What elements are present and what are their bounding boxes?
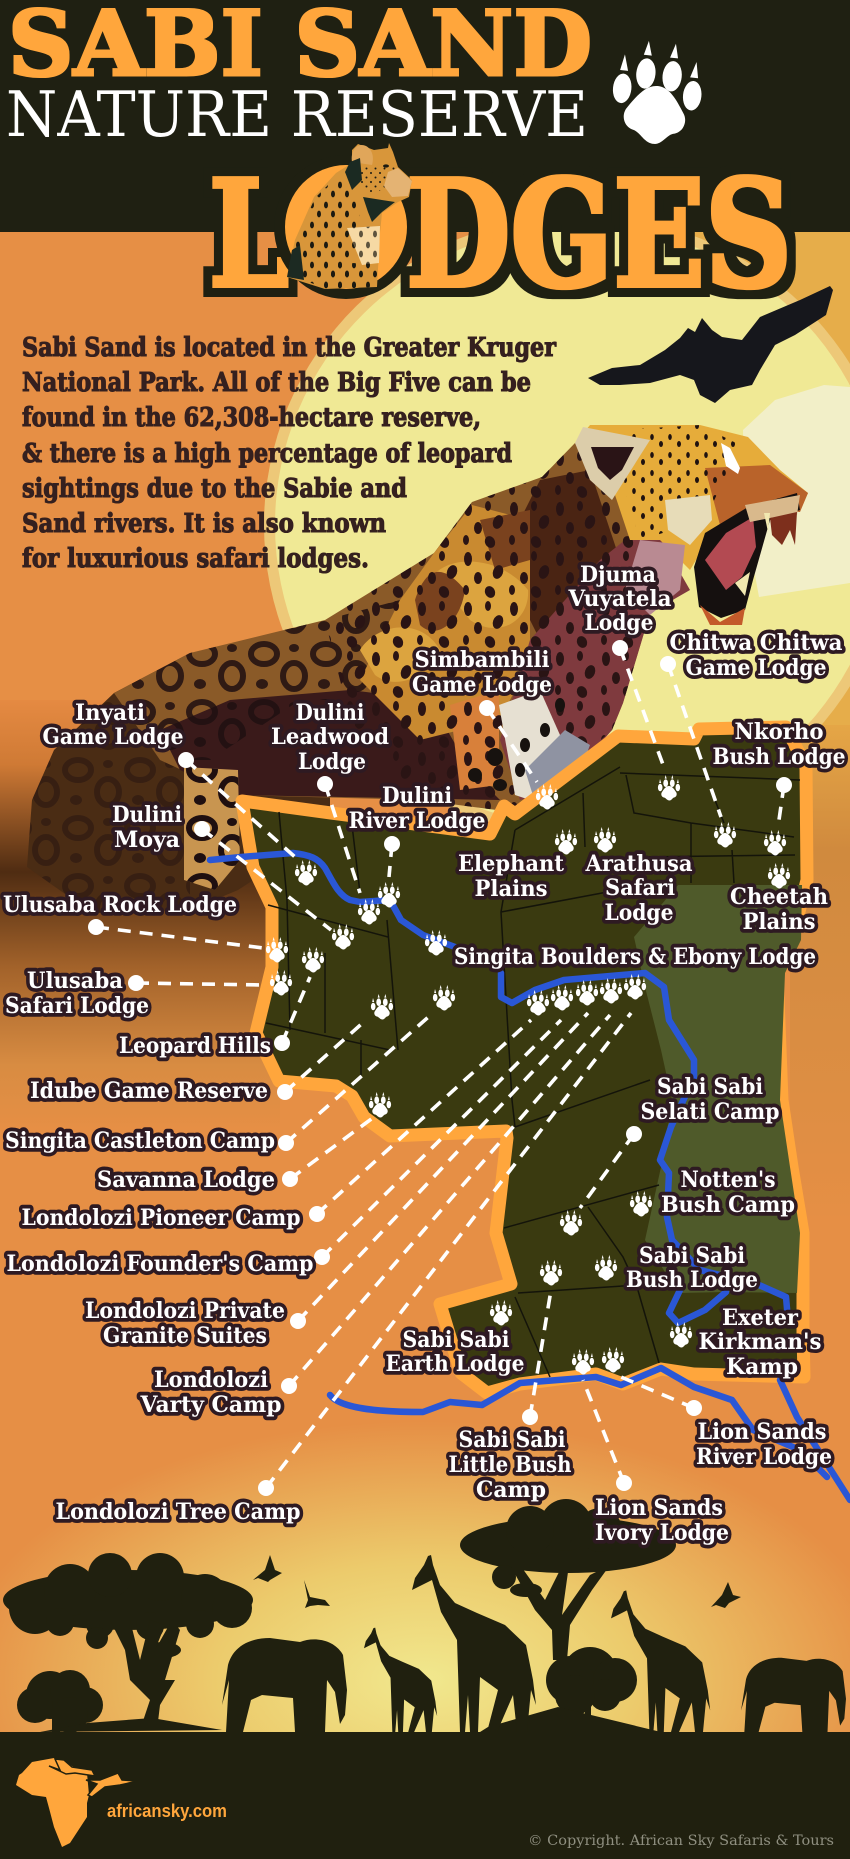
ear: [575, 427, 650, 500]
label: Cheetah Plains: [730, 884, 828, 935]
leader lines and markers: [88, 640, 792, 1496]
orange flank: [450, 690, 499, 790]
label: Singita Castleton Camp: Singita Castleton Camp: [5, 1128, 275, 1154]
label: Exeter Kirkman's Kamp: Kirkman's: [698, 1329, 822, 1355]
leader: River Lodge: [621, 1377, 702, 1416]
label: Exeter Kirkman's Kamp: [698, 1305, 822, 1380]
label: Inyati Game Lodge: [42, 700, 184, 750]
grey chest shade: [525, 730, 590, 802]
intro paragraph: & there is a high percentage of leopard: [22, 438, 512, 469]
bottom silhouette landscape: [3, 1499, 846, 1733]
label: Sabi Sabi Selati Camp: Selati Camp: [640, 1099, 780, 1125]
leopard chest spots: [347, 226, 380, 265]
label: Inyati Game Lodge: Inyati: [75, 700, 145, 726]
brown patches: [415, 510, 530, 631]
leopard dark flank: [287, 245, 304, 280]
giraffe small: [364, 1628, 437, 1732]
Africa shape: [16, 1758, 89, 1847]
label: Londolozi Varty Camp: [140, 1367, 282, 1418]
cheek: [665, 495, 712, 545]
leader: Varty: [281, 1015, 610, 1394]
bush centre: [546, 1647, 637, 1720]
label: Sabi Sabi Bush Lodge: [626, 1243, 758, 1293]
intro paragraph: for luxurious safari lodges.: [22, 543, 369, 574]
acacia tree left: [3, 1553, 253, 1730]
leopard head shade: [345, 158, 362, 190]
gold shoulder: [360, 505, 530, 740]
label: Dulini Leadwood Lodge: Leadwood: [271, 724, 389, 750]
label: Simbambili Game Lodge: Simbambili: [414, 647, 550, 673]
intro paragraph: Sand rivers. It is also known: [22, 508, 386, 539]
intro paragraph: National Park. All of the Big Five can be: [22, 367, 531, 398]
leader: Idube: [277, 1020, 366, 1100]
leopard body: [287, 143, 412, 289]
label: Sabi Sabi Earth Lodge: Sabi Sabi: [402, 1327, 510, 1353]
label: Ulusaba Safari Lodge: [5, 968, 149, 1019]
head: [575, 425, 808, 570]
label: Londolozi Pioneer Camp: Londolozi Pioneer Camp: [22, 1205, 300, 1231]
rear spots: [27, 693, 190, 913]
leader: Granite Suites: [290, 1013, 588, 1329]
purple neck: [500, 520, 690, 800]
intro paragraph: Sabi Sand is located in the Greater Kruger: [22, 332, 557, 363]
leopard snout: [384, 168, 412, 197]
open mouth: [694, 493, 800, 618]
footer band: [0, 1732, 850, 1859]
label: Dulini Leadwood Lodge: Dulini: [296, 700, 364, 726]
label: Sabi Sabi Little Bush Camp: Camp: [476, 1477, 546, 1503]
copyright: © Copyright. African Sky Safaris & Tours: [528, 1833, 834, 1849]
leopard chest: [347, 226, 380, 265]
website: africansky.com: [107, 1801, 227, 1821]
label: Lion Sands Ivory Lodge: [595, 1495, 729, 1546]
muzzle top: [705, 465, 808, 525]
elephant left: [222, 1638, 347, 1732]
label: Lion Sands River Lodge: River Lodge: [696, 1444, 832, 1470]
plane one: [49, 1759, 95, 1776]
label: Singita Boulders & Ebony Lodge: Singita Boulders & Ebony Lodge: [454, 944, 816, 970]
white cloud: [743, 385, 850, 597]
label: Nkorho Bush Lodge: [712, 719, 846, 770]
lower jaw: [700, 605, 745, 625]
head spots: [620, 425, 740, 540]
label: Notten's Bush Camp: Bush Camp: [661, 1192, 795, 1218]
label: Ulusaba Safari Lodge: Ulusaba: [27, 968, 123, 994]
paw markers: [266, 775, 790, 1374]
label: Londolozi Tree Camp: Londolozi Tree Camp: [56, 1499, 300, 1525]
label: Sabi Sabi Selati Camp: [640, 1074, 780, 1125]
label: Ulusaba Safari Lodge: Safari Lodge: [5, 993, 149, 1019]
plane two: [86, 1773, 138, 1797]
label: Ulusaba Rock Lodge: Ulusaba Rock Lodge: [3, 892, 237, 918]
label: Sabi Sabi Little Bush Camp: [448, 1427, 572, 1503]
leader: Dulini Leadwood: [317, 776, 360, 893]
muzzle drip: [770, 512, 797, 545]
mouth interior: [705, 517, 756, 590]
leopard ear: [352, 145, 373, 165]
giraffe large: [412, 1555, 536, 1732]
sitting leopard: [287, 143, 412, 289]
top-right warm sky: [560, 232, 850, 732]
ground hills: [40, 1707, 661, 1732]
canine teeth: [735, 513, 784, 596]
label: Elephant Plains: [458, 851, 565, 902]
label: Dulini Moya: [112, 802, 182, 853]
label: Elephant Plains: Elephant: [458, 851, 565, 877]
leader: Singita Castleton: [278, 1012, 434, 1151]
label: Exeter Kirkman's Kamp: Exeter: [722, 1305, 798, 1331]
label: Sabi Sabi Earth Lodge: Earth Lodge: [386, 1351, 524, 1377]
label: Sabi Sabi Bush Lodge: Sabi Sabi: [639, 1243, 745, 1269]
label: Savanna Lodge: Savanna Lodge: [97, 1167, 275, 1193]
label: Idube Game Reserve: Idube Game Reserve: [30, 1078, 268, 1104]
chest spots: [468, 698, 565, 791]
label: Lion Sands Ivory Lodge: Lion Sands: [595, 1495, 723, 1521]
leopard neck shade: [363, 197, 395, 222]
label: Notten's Bush Camp: [661, 1167, 795, 1218]
label: Djuma Vuyatela Lodge: Lodge: [584, 610, 654, 636]
throat: [625, 540, 685, 615]
leopard spots: [289, 175, 362, 288]
label: Arathusa Safari Lodge: [585, 851, 692, 926]
leader: Selati: [580, 1126, 642, 1208]
leader: Djuma Vuyatela: [612, 640, 665, 770]
leopard face spots: [360, 165, 398, 195]
label: Londolozi Founder's Camp: Londolozi Founder's Camp: [6, 1251, 314, 1277]
label: Sabi Sabi Little Bush Camp: Little Bush: [448, 1452, 572, 1478]
label: Cheetah Plains: Plains: [742, 909, 816, 935]
O fill behind leopard: [285, 165, 407, 289]
leader: Dulini Moya: [194, 821, 331, 930]
label: Lion Sands River Lodge: [696, 1419, 832, 1470]
leader: Tree Camp: [258, 1013, 631, 1496]
label: Djuma Vuyatela Lodge: Vuyatela: [568, 586, 672, 612]
leader: Ulusaba Rock: [88, 919, 263, 948]
label: Inyati Game Lodge: Game Lodge: [42, 724, 184, 750]
eye: [721, 443, 740, 474]
reserve area with border: [242, 727, 807, 1393]
label: Exeter Kirkman's Kamp: Kamp: [726, 1354, 798, 1380]
logo: Africa with birds: [16, 1758, 138, 1847]
bird silhouette: [588, 286, 833, 403]
label: Lion Sands Ivory Lodge: Ivory Lodge: [595, 1520, 729, 1546]
intro paragraph: found in the 62,308-hectare reserve,: [22, 402, 481, 433]
leader: Dulini River: [384, 836, 400, 877]
bottom sunset glow: [0, 1420, 850, 1740]
label: Londolozi Private Granite Suites: Granite Suites: [103, 1323, 267, 1349]
label: Dulini Moya: Moya: [114, 827, 180, 853]
river: loop: [669, 1290, 726, 1323]
label: Notten's Bush Camp: Notten's: [680, 1167, 776, 1193]
leader: Ivory: [583, 1380, 632, 1491]
label: Chitwa Chitwa Game Lodge: Chitwa Chitwa: [670, 630, 842, 656]
label: Djuma Vuyatela Lodge: [568, 562, 672, 636]
label: Londolozi Varty Camp: Varty Camp: [140, 1392, 282, 1418]
label: Arathusa Safari Lodge: Arathusa: [585, 851, 692, 877]
inner ear: [591, 447, 634, 480]
label: Londolozi Private Granite Suites: [85, 1298, 285, 1349]
leader: Chitwa Chitwa: [660, 656, 721, 817]
header band: [0, 0, 850, 232]
label: Arathusa Safari Lodge: Safari: [605, 875, 675, 901]
label: Chitwa Chitwa Game Lodge: [670, 630, 842, 681]
river: Sand: [210, 853, 788, 1320]
lodges heading: [209, 143, 792, 321]
leader: Leopard Hills: [274, 977, 310, 1051]
label: Dulini Moya: Dulini: [112, 802, 182, 828]
sun halo: [264, 215, 850, 835]
rear leg patch: [184, 767, 240, 890]
white chest: [499, 690, 565, 800]
intro paragraph: sightings due to the Sabie and: [22, 473, 407, 504]
dark shoulder: [500, 470, 620, 640]
leopard main illustration: [27, 425, 808, 913]
intro paragraph: [22, 332, 557, 574]
acacia tree centre: [460, 1499, 676, 1660]
icon: large paw: [608, 38, 707, 148]
label: Londolozi Varty Camp: Londolozi: [154, 1367, 268, 1393]
lighter eastern zone: [634, 885, 802, 1293]
rump dark: [160, 690, 500, 800]
body back: [114, 443, 650, 813]
leopard eye: [383, 164, 389, 168]
label: Dulini Leadwood Lodge: Lodge: [298, 749, 366, 775]
rear haunch: [27, 653, 330, 913]
sun: [275, 225, 850, 825]
label: Leopard Hills: Leopard Hills: [119, 1033, 271, 1059]
letter L: L: [209, 147, 289, 321]
leader: Little Bush: [522, 1290, 551, 1425]
label: Simbambili Game Lodge: Game Lodge: [412, 672, 552, 698]
label: Dulini River Lodge: River Lodge: [348, 808, 486, 834]
label: Chitwa Chitwa Game Lodge: Game Lodge: [686, 655, 826, 681]
leader: Nkorho: [776, 777, 792, 827]
leader: Inyati: [178, 752, 295, 857]
yellow patches: [360, 561, 528, 682]
label: Lion Sands River Lodge: Lion Sands: [698, 1419, 826, 1445]
leader: Simbambili: [479, 700, 537, 782]
label: Sabi Sabi Bush Lodge: Bush Lodge: [626, 1267, 758, 1293]
label: Londolozi Private Granite Suites: Londolozi Private: [85, 1298, 285, 1324]
label: Sabi Sabi Earth Lodge: [386, 1327, 524, 1377]
label: Simbambili Game Lodge: [412, 647, 552, 698]
giraffe right: [611, 1590, 710, 1732]
leopard front leg: [325, 262, 378, 289]
leader: Savanna: [282, 1117, 374, 1187]
label: Djuma Vuyatela Lodge: Djuma: [580, 562, 656, 588]
label: Cheetah Plains: Cheetah: [730, 884, 828, 910]
elephant right: [741, 1658, 846, 1732]
rump rosettes: [114, 600, 430, 760]
river: Sabie: [330, 1368, 850, 1500]
leader: Founder's: [314, 1020, 561, 1265]
dark halo behind O: [274, 155, 418, 299]
letter O: O: [285, 147, 407, 321]
label: Dulini River Lodge: [348, 783, 486, 834]
body spots: [325, 443, 650, 813]
upper lip: [745, 495, 800, 522]
rear leg pattern: [184, 767, 240, 890]
bush left: [17, 1670, 103, 1733]
label: Sabi Sabi Little Bush Camp: Sabi Sabi: [458, 1427, 566, 1453]
label: Dulini Leadwood Lodge: [271, 700, 389, 775]
title: Nature Reserve: NATURE RESERVE: [6, 78, 588, 151]
leader: Ulusaba Safari: [128, 975, 265, 991]
leader: Pioneer: [309, 1020, 531, 1222]
label: Arathusa Safari Lodge: Lodge: [604, 900, 674, 926]
label: Elephant Plains: Plains: [474, 876, 548, 902]
label: Nkorho Bush Lodge: Nkorho: [734, 719, 824, 745]
label: Sabi Sabi Selati Camp: Sabi Sabi: [657, 1074, 763, 1100]
right ground band: [790, 725, 850, 1225]
left hills band: [0, 700, 280, 1130]
map of the reserve: [210, 727, 850, 1500]
label: Dulini River Lodge: Dulini: [382, 783, 452, 809]
property boundaries: [266, 767, 800, 1377]
birds: [253, 1555, 741, 1608]
